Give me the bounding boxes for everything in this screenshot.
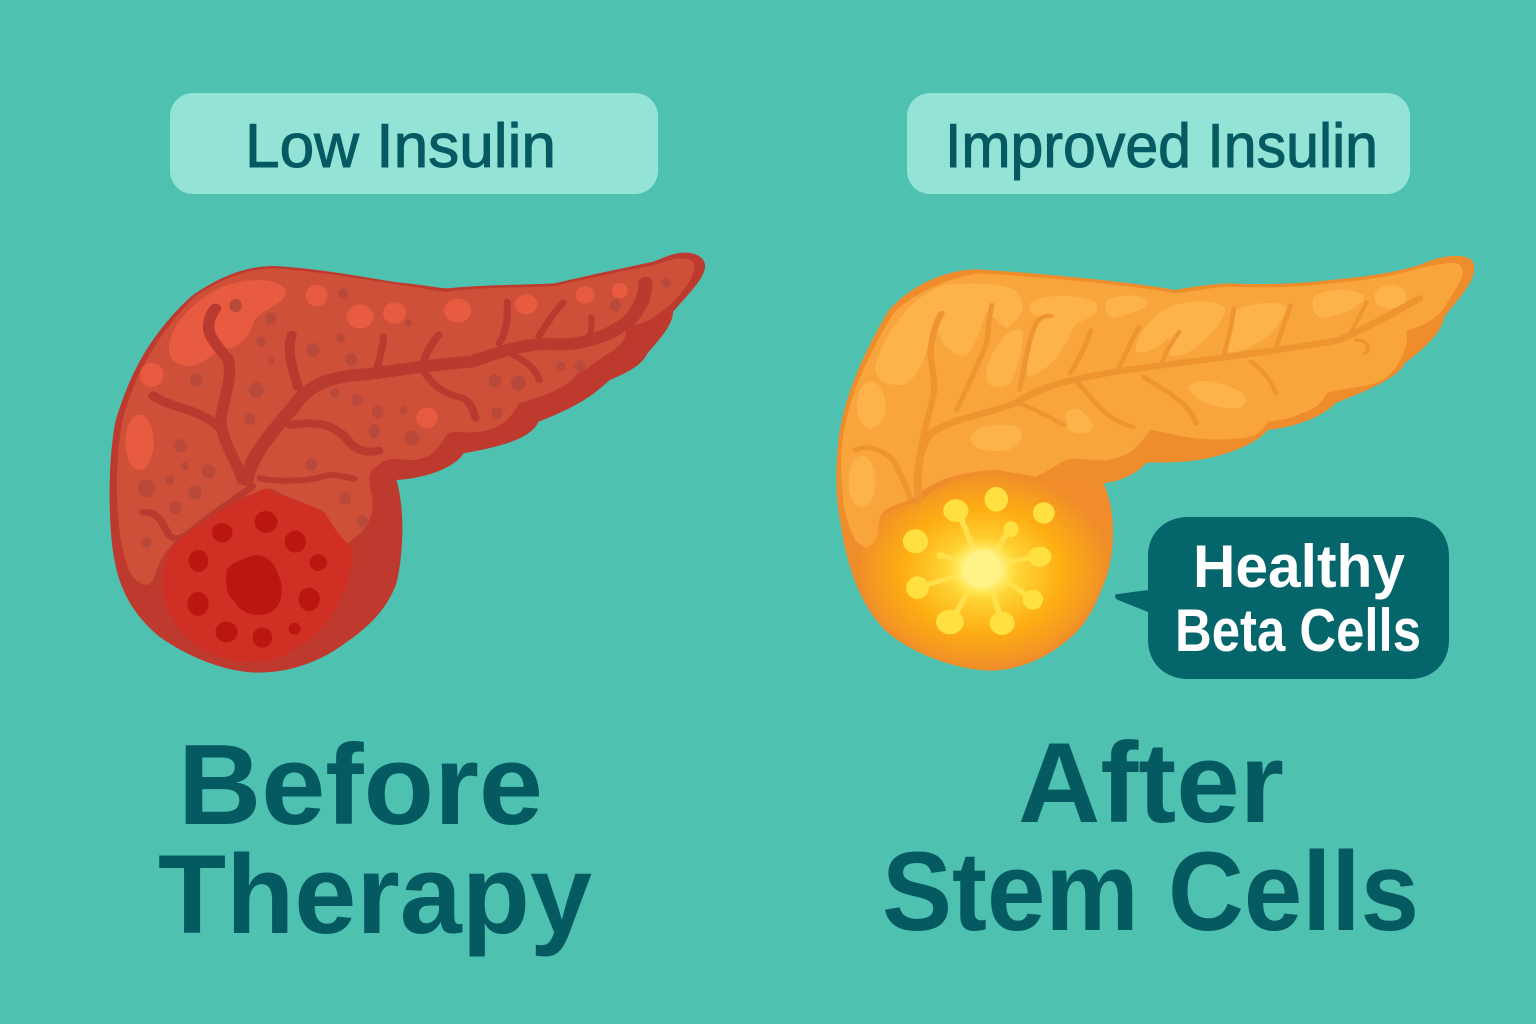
pancreas lighter lobes [117,258,694,585]
small darker spots [138,278,671,548]
beta cell cluster [903,487,1055,635]
callout: Healthy Beta Cells: Beta Cells [1175,597,1421,664]
heading: After Stem Cells: Stem Cells [882,829,1419,954]
callout: Healthy Beta Cells [1115,517,1449,679]
necrotic spots [187,511,327,648]
blood vessels [143,283,646,539]
illustration: healthy orange pancreas [836,256,1474,671]
heading: After Stem Cells [882,720,1419,954]
heading: After Stem Cells: After [1018,720,1284,847]
label pill: Improved Insulin: Improved Insulin [945,112,1378,181]
glowing core [947,537,1018,601]
veins [855,298,1419,498]
lighter lobes [841,263,1463,552]
heading: Before Therapy: Therapy [158,832,592,957]
illustration: diseased red pancreas [110,253,705,673]
label pill: Improved Insulin [907,93,1410,194]
label pill: Low Insulin [170,93,658,194]
pancreas outer body [110,253,705,673]
beta cells [903,487,1055,635]
damaged islet [162,488,353,662]
glowing islet [855,472,1111,670]
light blotches [125,280,628,470]
callout: Healthy Beta Cells: Healthy [1193,533,1406,600]
lightest patches [849,283,1407,508]
cell arms [918,517,1038,623]
label pill: Low Insulin: Low Insulin [245,112,556,181]
heading: Before Therapy [158,722,592,957]
heading: Before Therapy: Before [178,722,543,849]
pancreas outer body [836,256,1474,671]
